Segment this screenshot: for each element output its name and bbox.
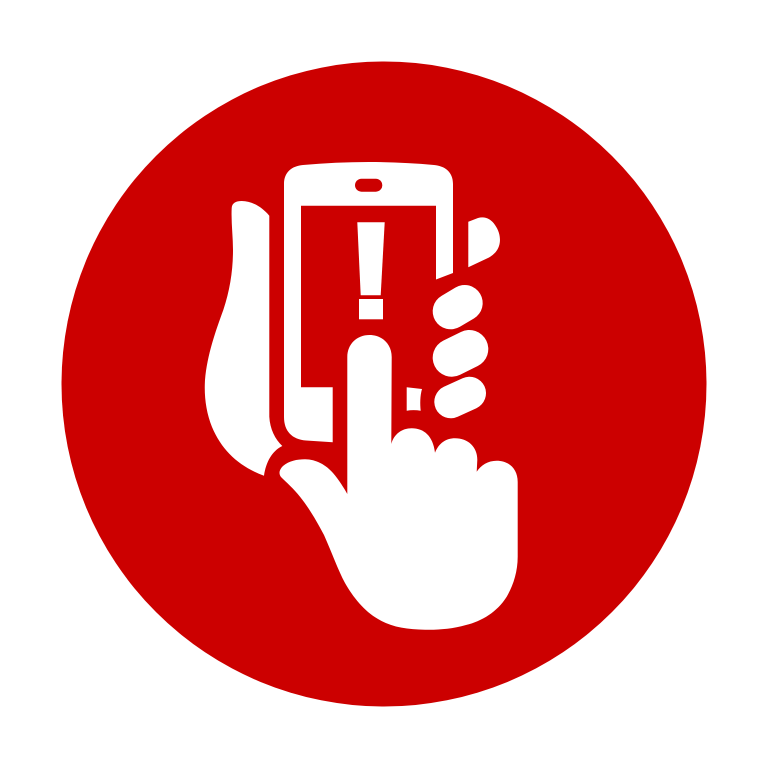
icon: phone screen corner fragment bbox=[407, 387, 422, 411]
icon: pointing hand bbox=[280, 335, 518, 630]
icon: exclamation mark bbox=[357, 222, 385, 319]
icon: holding hand thumb tip bbox=[468, 217, 500, 267]
icon: holding hand palm bbox=[205, 201, 282, 476]
red circle background bbox=[62, 62, 706, 706]
icon: phone body bbox=[284, 162, 453, 442]
icon: phone speaker bbox=[355, 179, 382, 192]
icon: gripping fingers bbox=[451, 303, 470, 402]
